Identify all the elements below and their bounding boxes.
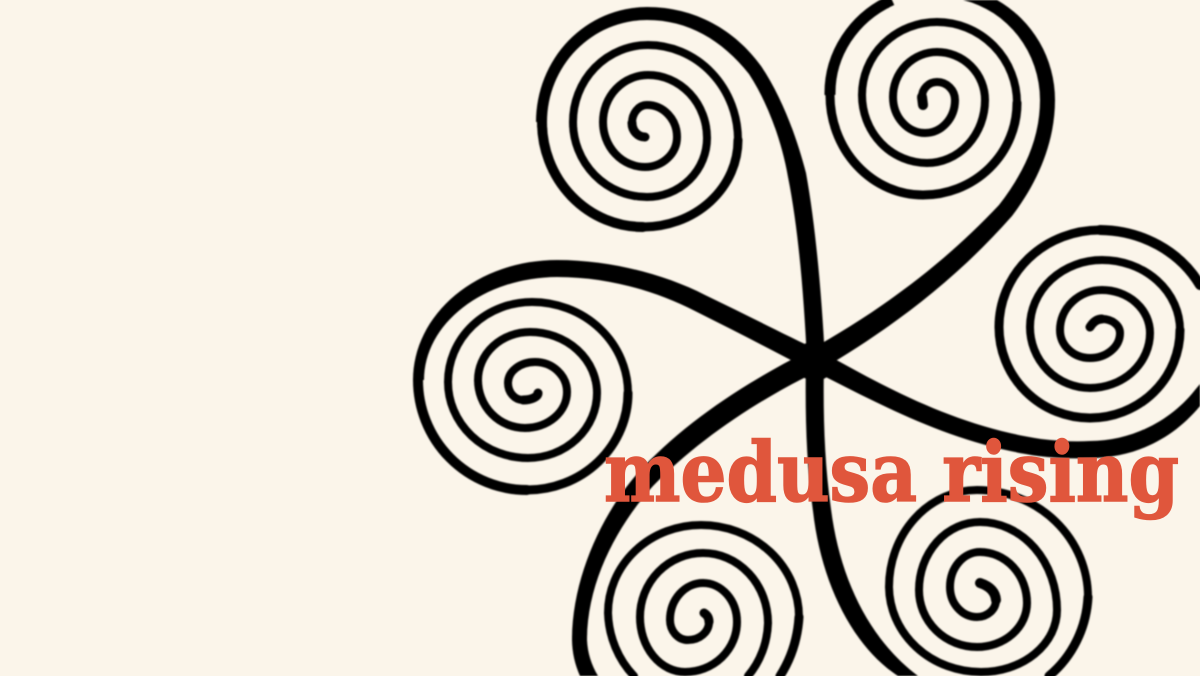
- icon: six-armed spiral symbol: [413, 0, 1200, 676]
- spiral: top left: [536, 7, 825, 360]
- spiral: bottom left: [572, 351, 822, 676]
- spiral: top right: [808, 0, 1055, 369]
- centre hub: [795, 341, 835, 381]
- spiral: bottom right: [806, 360, 1088, 676]
- spiral: right: [808, 230, 1200, 458]
- spiral: left: [413, 260, 822, 490]
